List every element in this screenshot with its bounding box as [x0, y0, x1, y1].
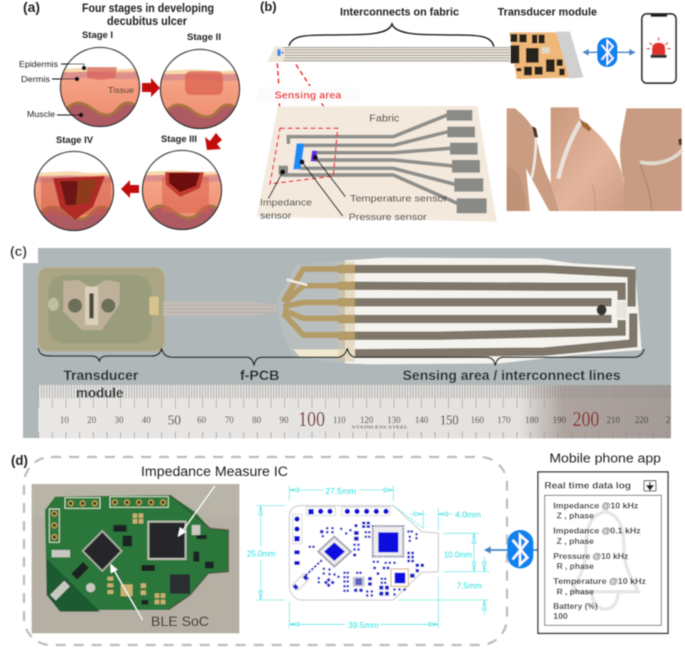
region labels: Sensing area / interconnect lines: [403, 368, 621, 383]
arrow: stage I to II: [142, 78, 160, 97]
log title: Real time data log: [544, 481, 631, 491]
transducer module photo: [38, 268, 164, 351]
sensor labels: sensor: [260, 211, 291, 221]
panel: (d) transducer electronics: [11, 451, 668, 645]
anatomy labels with leader lines: Tissue: [108, 85, 134, 95]
smartphone with alarm: [642, 14, 676, 83]
small IC footprint: [391, 569, 408, 586]
ruler numbers: 160: [471, 415, 484, 425]
ruler numbers: 90: [279, 415, 289, 425]
phone data log frame: [538, 472, 668, 633]
dimension values: [247, 486, 482, 630]
region labels: f-PCB: [240, 368, 279, 383]
label notch with (c): [0, 240, 38, 263]
app heading: Mobile phone app: [549, 451, 661, 466]
log entries: [553, 500, 646, 621]
PCB layout drawing: [247, 486, 489, 630]
panel: (c) device photograph: [0, 240, 671, 438]
photo background: [23, 248, 671, 438]
shoulder view: [551, 107, 633, 211]
log entries: R , phase: [557, 586, 594, 596]
arm view: [507, 108, 559, 211]
sensing area label: [257, 87, 359, 102]
transducer module board: [509, 32, 583, 79]
log entries: Battery (%): [553, 601, 598, 611]
ruler numbers: [60, 409, 671, 431]
ruler numbers: 2: [666, 415, 671, 425]
ruler: [38, 385, 671, 438]
ruler numbers: 80: [252, 415, 262, 425]
bluetooth link: [484, 530, 545, 568]
ruler numbers: 30: [114, 415, 124, 425]
passive component pads: [309, 522, 424, 597]
arrow: stage II to III: [205, 133, 222, 150]
wearing positions: arm, shoulder, hip: [507, 107, 682, 211]
brace over interconnects: [289, 24, 494, 47]
panel label (d): (d): [11, 453, 28, 468]
log entries: 100: [553, 611, 568, 621]
ruler numbers: 50: [168, 412, 181, 427]
antenna: [293, 560, 322, 590]
stage labels: [56, 30, 221, 146]
traces and contact pads: [279, 110, 487, 213]
dimension values: 27.5mm: [325, 486, 356, 496]
fabric sensor illustration: [257, 106, 497, 222]
large IC footprint: [373, 526, 403, 557]
small components: [107, 513, 165, 604]
faint bell watermark: [572, 512, 638, 609]
title: decubitus ulcer: [107, 16, 187, 28]
header pads: [294, 509, 389, 565]
arrow: stage III to IV: [121, 180, 139, 198]
heading: interconnects on fabric: Interconnects on fabric: [340, 6, 459, 18]
stage IV illustration: [33, 150, 115, 232]
log entries: Z , phase: [557, 536, 594, 546]
BLE SoC chip: [83, 531, 122, 571]
sensing fabric with traces: [338, 258, 642, 364]
fabric label: Fabric: [369, 113, 399, 124]
bluetooth link: [583, 38, 635, 67]
label overlapping ruler: module: [76, 385, 124, 400]
stage labels: Stage I: [82, 30, 113, 41]
panel: (b) system schematic: [257, 0, 676, 222]
panel label (a): (a): [23, 0, 40, 15]
ruler numbers: 180: [525, 415, 539, 425]
PCB photograph: [32, 484, 239, 633]
label: impedance measure IC: Impedance Measure IC: [141, 464, 288, 479]
ruler numbers: 70: [225, 415, 234, 425]
anatomy labels with leader lines: [19, 59, 134, 119]
sensing area label: Sensing area: [275, 90, 342, 101]
region braces: [38, 348, 644, 366]
anatomy labels with leader lines: Epidermis: [19, 59, 58, 69]
dashed enclosure: [24, 457, 507, 645]
ruler numbers: 170: [497, 415, 511, 425]
ruler numbers: 200: [573, 409, 599, 431]
title: Four stages in developing: [82, 3, 214, 15]
ruler numbers: 20: [87, 415, 97, 425]
log entries: Impedance @0.1 kHz: [553, 525, 641, 535]
region labels: Transducer: [63, 368, 139, 383]
stage labels: Stage IV: [56, 135, 94, 146]
stage II illustration: [159, 48, 241, 130]
dashed sensing area box: [270, 128, 338, 184]
label: BLE SoC: BLE SoC: [151, 613, 209, 629]
leader lines: [268, 155, 345, 216]
ruler numbers: 210: [607, 415, 620, 425]
anatomy labels with leader lines: Dermis: [21, 74, 50, 84]
ruler numbers: 60: [197, 415, 207, 425]
rotated BLE chip: [318, 537, 351, 567]
ruler numbers: 130: [387, 415, 401, 425]
stage labels: Stage II: [187, 32, 221, 43]
small chip: [170, 574, 190, 594]
dimension values: 25.0mm: [247, 549, 275, 559]
title: [82, 3, 214, 28]
stage I illustration: [59, 46, 141, 128]
impedance IC chip: [148, 522, 186, 559]
dimension values: 39.5mm: [348, 620, 379, 630]
f-PCB ribbon and fan-out: [163, 261, 355, 363]
sensor labels: Temperature sensor: [350, 194, 447, 204]
fabric strip with interconnects: [267, 47, 510, 62]
heading: transducer module: Transducer module: [498, 6, 597, 18]
ruler numbers: 220: [635, 415, 649, 425]
log entries: Temperature @10 kHz: [553, 576, 646, 586]
red zoom guide lines: [277, 63, 337, 128]
white callout arrows: [111, 486, 215, 620]
dimension values: 4.0mm: [455, 510, 481, 520]
ruler numbers: 190: [553, 415, 566, 425]
ruler imprint: STAINLESS STEEL: [352, 425, 409, 430]
log entries: Pressure @10 kHz: [553, 551, 628, 561]
ruler numbers: 140: [415, 415, 429, 425]
label notch with (c): (c): [10, 244, 27, 259]
ruler numbers: 120: [360, 415, 374, 425]
ruler numbers: 100: [298, 409, 325, 431]
sensor labels: Pressure sensor: [349, 212, 427, 222]
stage III illustration: [141, 149, 223, 231]
log entries: Z , phase: [557, 510, 594, 520]
log entries: Impedance @10 kHz: [553, 500, 638, 510]
panel: (a) four stages of decubitus ulcer: [19, 0, 245, 241]
dimension lines: [257, 486, 489, 628]
header pins: [49, 497, 168, 542]
sensor labels: [260, 194, 447, 222]
region labels: [63, 368, 621, 383]
ruler numbers: 10: [60, 415, 69, 425]
anatomy labels with leader lines: Muscle: [27, 109, 55, 119]
pressure and temperature sensors: [293, 143, 317, 169]
ruler numbers: 150: [440, 412, 459, 427]
log entries: R , phase: [557, 561, 594, 571]
ruler numbers: 110: [333, 415, 346, 425]
stage labels: Stage III: [161, 134, 197, 145]
ruler numbers: 40: [142, 415, 151, 425]
dimension values: 7.5mm: [457, 580, 482, 590]
hip view: [620, 108, 682, 211]
sensor labels: Impedance: [260, 198, 312, 208]
download icon: [644, 481, 656, 491]
dimension values: 10.0mm: [444, 550, 472, 560]
bluetooth link and mobile app: [484, 451, 668, 633]
